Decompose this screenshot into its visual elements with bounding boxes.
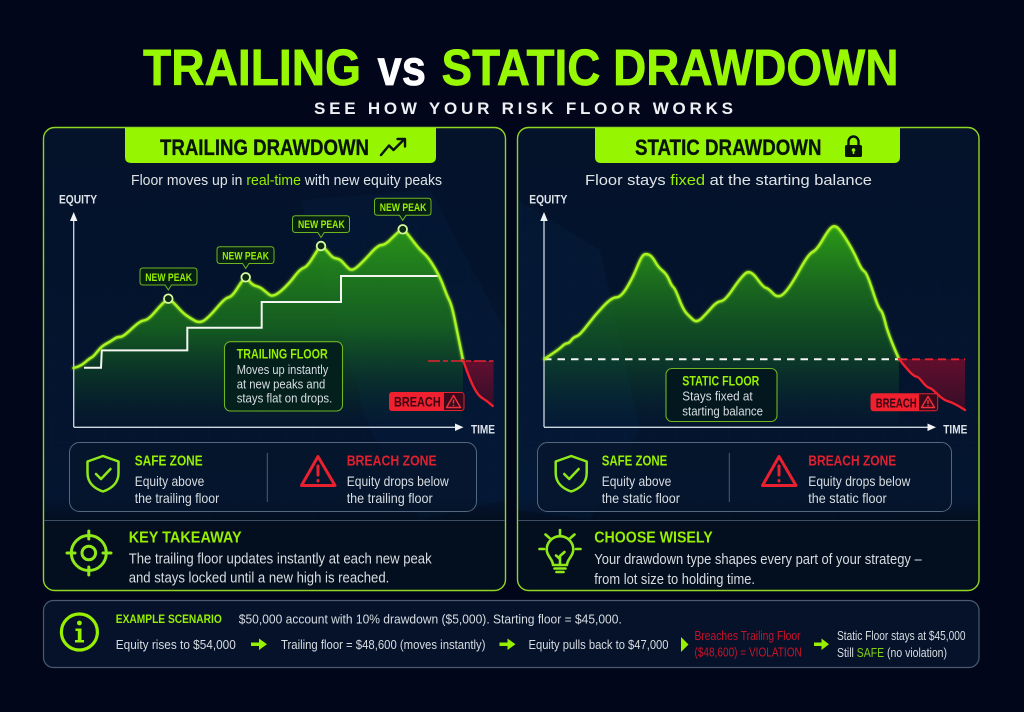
new peak marker 3: NEW PEAK [298, 219, 345, 231]
step: static floor safe: Static Floor stays at $45,000 [837, 628, 966, 643]
safe zone: Equity above [602, 473, 671, 489]
breach level line [428, 360, 494, 362]
panel subtitle: trailing: Floor moves up in real-time with new equity peaks [131, 172, 442, 189]
chart: static drawdown [529, 192, 967, 436]
choose wisely: Your drawdown type shapes every part of your strategy – [594, 551, 922, 568]
callout: static floor: starting balance [682, 403, 763, 418]
callout: trailing floor: stays flat on drops. [237, 391, 332, 406]
step: equity rises: Equity rises to $54,000 [116, 637, 236, 652]
arrow 3 [681, 637, 688, 652]
new peak marker 4 [374, 198, 431, 234]
header tab: trailing: TRAILING DRAWDOWN [160, 135, 369, 160]
callout: static floor: Stays fixed at [682, 389, 753, 404]
breach dashed line [899, 358, 965, 360]
safe zone: the static floor [602, 490, 680, 506]
icon: warning triangle [302, 456, 335, 486]
axis: horizontal [74, 424, 463, 431]
breach line [899, 359, 965, 410]
step: equity pulls back: Equity pulls back to $47,000 [528, 637, 668, 652]
key takeaway [67, 530, 432, 587]
header tab: static: STATIC DRAWDOWN [635, 135, 822, 160]
step: static floor safe [837, 628, 966, 660]
area under equity curve [74, 230, 463, 427]
axis: horizontal [544, 424, 936, 431]
legend: trailing zones [70, 442, 476, 512]
safe zone [88, 453, 220, 506]
choose wisely: CHOOSE WISELY [594, 530, 713, 546]
title: STATIC DRAWDOWN [442, 39, 898, 96]
icon: warning [922, 396, 934, 408]
panel: static drawdown [518, 128, 979, 590]
safe zone: the trailing floor [135, 490, 220, 506]
breach zone [762, 453, 911, 506]
arrow 1 [251, 638, 267, 650]
step: violation: Breaches Trailing Floor [694, 628, 801, 643]
trailing floor line [84, 276, 440, 368]
axis: vertical [540, 212, 548, 427]
icon: shield [88, 456, 118, 492]
new peak marker 2: NEW PEAK [222, 250, 269, 262]
icon: trending arrow [381, 139, 405, 155]
area under equity curve [544, 226, 899, 427]
new peak marker 1: NEW PEAK [145, 272, 192, 284]
callout: trailing floor: at new peaks and [237, 376, 325, 391]
step: violation [694, 628, 802, 660]
header tab: static [595, 128, 900, 163]
breach area [899, 359, 965, 410]
callout: static floor: STATIC FLOOR [682, 373, 759, 389]
key takeaway: KEY TAKEAWAY [129, 530, 242, 546]
breach zone [302, 453, 449, 506]
axis label: equity: EQUITY [59, 192, 97, 206]
new peak marker 3 [292, 216, 350, 250]
safe zone: Equity above [135, 473, 204, 489]
safe zone: SAFE ZONE [135, 453, 203, 470]
icon: light bulb [540, 530, 580, 572]
axis: vertical [70, 212, 77, 427]
example intro: $50,000 account with 10% drawdown ($5,000). Starting floor = $45,000. [239, 612, 622, 626]
arrow 4 [814, 638, 829, 650]
icon: target [67, 531, 111, 575]
safe zone [556, 453, 680, 506]
header tab: trailing [125, 128, 436, 163]
icon: shield [556, 456, 587, 492]
subtitle: SEE HOW YOUR RISK FLOOR WORKS [314, 99, 733, 118]
static floor dashed line [544, 358, 899, 360]
breach line [463, 360, 493, 406]
legend: static zones [538, 442, 952, 512]
callout: trailing floor: Moves up instantly [237, 362, 329, 377]
breach zone: BREACH ZONE [347, 453, 437, 470]
icon: info [61, 614, 97, 650]
example heading: EXAMPLE SCENARIO [116, 612, 222, 626]
breach zone: the trailing floor [347, 490, 433, 506]
chart: trailing drawdown [59, 192, 495, 436]
key takeaway: and stays locked until a new high is reached. [129, 570, 389, 587]
axis label: equity: EQUITY [529, 192, 567, 206]
breach tag: BREACH [876, 395, 917, 410]
breach zone: the static floor [808, 490, 887, 506]
axis label: time: TIME [943, 422, 967, 436]
callout: trailing floor: TRAILING FLOOR [237, 345, 328, 361]
breach zone: BREACH ZONE [808, 453, 896, 470]
icon: warning [446, 396, 460, 408]
title: TRAILING [143, 39, 361, 96]
safe zone: SAFE ZONE [602, 453, 667, 470]
title: vs [378, 40, 426, 96]
equity line [74, 230, 463, 368]
step: static floor safe: Still SAFE (no violation) [837, 645, 947, 660]
icon: warning triangle [762, 456, 796, 486]
step: trailing floor moves: Trailing floor = $48,600 (moves instantly) [281, 637, 486, 652]
choose wisely: from lot size to holding time. [594, 571, 755, 588]
step: violation: ($48,600) = VIOLATION [694, 644, 802, 660]
panel: example scenario [44, 600, 979, 668]
choose wisely [540, 530, 922, 588]
breach zone: Equity drops below [347, 473, 449, 489]
new peak marker 2 [217, 247, 274, 282]
new peak marker 1 [140, 268, 197, 303]
icon: lock [845, 136, 862, 157]
callout: trailing floor [224, 342, 342, 411]
title [143, 39, 898, 96]
axis label: time: TIME [471, 422, 495, 436]
panel: trailing drawdown [44, 128, 506, 590]
new peak marker 4: NEW PEAK [380, 202, 426, 214]
breach area [463, 361, 494, 406]
equity line [544, 226, 899, 359]
panel subtitle: static: Floor stays fixed at the starting balance [585, 172, 872, 189]
key takeaway: The trailing floor updates instantly at each new peak [129, 550, 432, 567]
breach zone: Equity drops below [808, 473, 911, 489]
breach tag: BREACH [394, 394, 441, 410]
callout: static floor [666, 368, 777, 422]
arrow 2 [500, 638, 516, 650]
